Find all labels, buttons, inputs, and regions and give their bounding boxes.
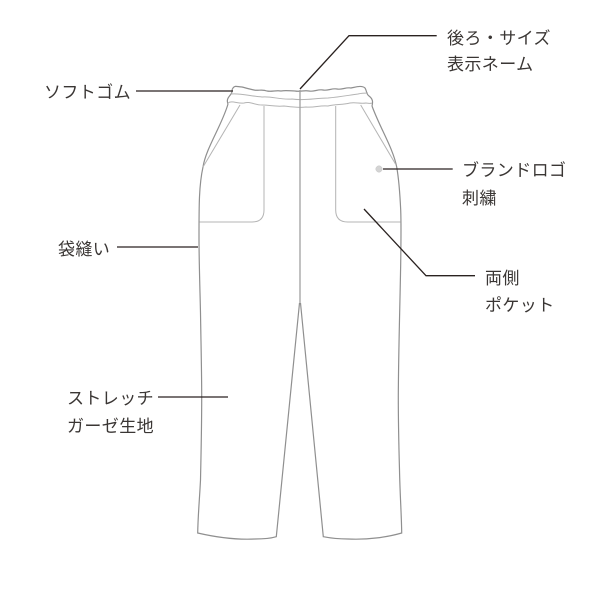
label: soft elastic: ソフトゴム	[44, 82, 131, 102]
left pocket	[200, 105, 264, 222]
label: brand logo embroidery: ブランドロゴ	[462, 161, 566, 180]
leader line: back size label	[300, 36, 437, 89]
label: back size label: 後ろ・サイズ	[447, 29, 551, 48]
label: bag seam: 袋縫い	[58, 240, 110, 259]
label: stretch gauze: ストレッチ	[67, 389, 154, 408]
center seam	[299, 90, 301, 303]
label: brand logo embroidery: 刺繍	[462, 189, 497, 208]
leader line: brand logo	[383, 168, 453, 170]
label: stretch gauze: ガーゼ生地	[67, 417, 154, 436]
leader line: bag seam	[117, 246, 198, 248]
label: back size label: 表示ネーム	[447, 55, 534, 74]
leader line: pockets	[364, 209, 475, 276]
waistband	[227, 86, 373, 107]
label: both side pockets: ポケット	[485, 296, 555, 315]
outer and inner leg outline	[198, 104, 300, 539]
leader line: soft elastic	[136, 90, 233, 92]
label: both side pockets: 両側	[485, 269, 520, 288]
embroidered logo mark	[376, 166, 382, 172]
right pocket	[336, 105, 400, 222]
leader line: stretch gauze	[158, 396, 228, 398]
pants line drawing	[198, 86, 402, 539]
